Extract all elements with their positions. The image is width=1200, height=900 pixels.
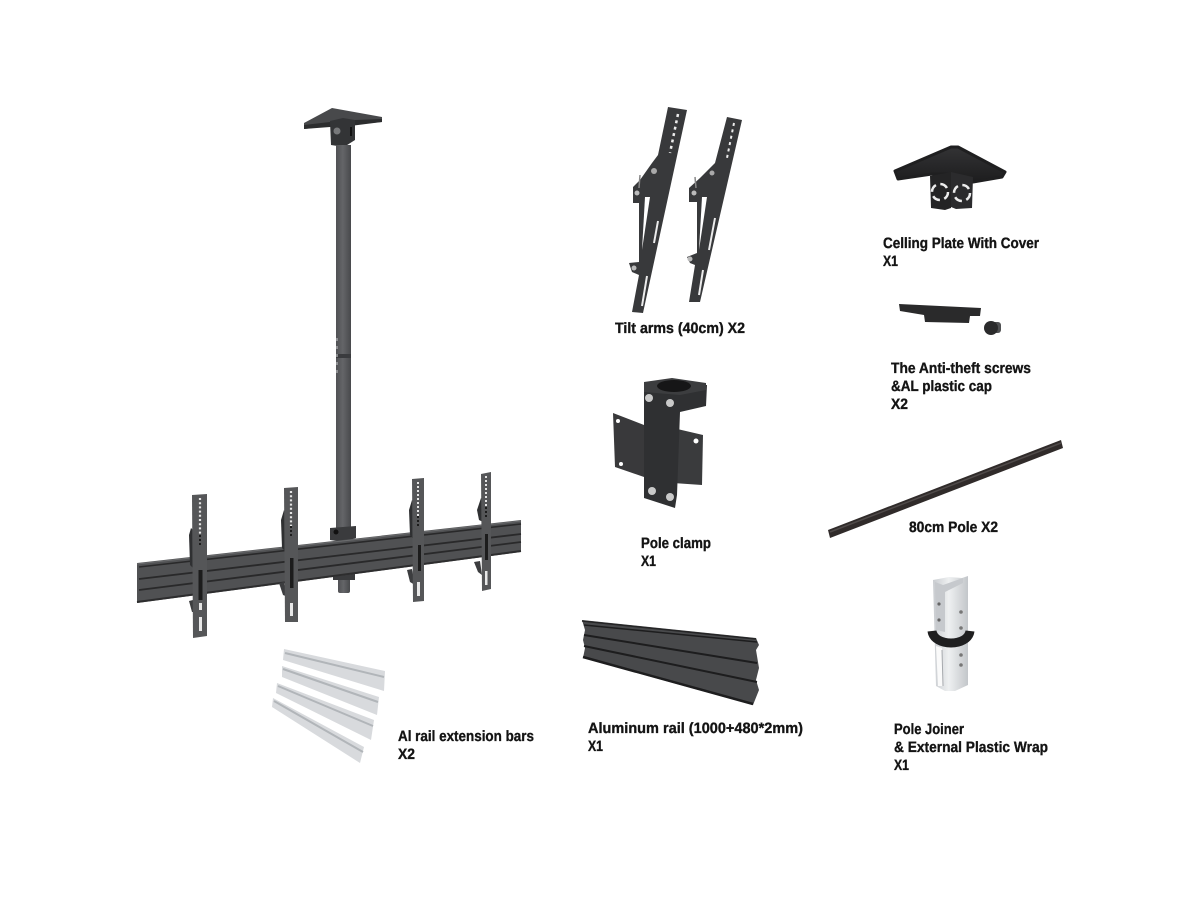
ceiling plate item [883,147,1039,270]
icon: ceiling plate with cover [895,147,1005,210]
icon: 80cm pole [828,440,1063,538]
tilt arms item [615,107,745,337]
label: screws line 2: &AL plastic cap [891,378,992,395]
icon: pole clamp [613,378,707,508]
icon: tilt arm left [629,107,687,313]
label: tilt arms: Tilt arms (40cm) X2 [615,320,745,337]
label: aluminum rail quantity: X1 [588,738,603,755]
icon: tilt arm right [687,117,742,302]
80cm pole item [828,440,1063,538]
label: ceiling plate: Celling Plate With Cover [883,235,1039,252]
icon: vertical pole [333,145,355,593]
label: pole joiner quantity: X1 [894,757,909,774]
icon: plastic cap [899,304,981,323]
label: extension bars: Al rail extension bars [398,728,534,745]
label: pole joiner line 2: & External Plastic Wrap [894,739,1048,756]
label: pole clamp: Pole clamp [641,535,711,552]
label: pole joiner line 1: Pole Joiner [894,721,964,738]
icon: pole clamp on rail [330,526,356,542]
aluminum rail item [582,620,803,755]
label: screws quantity: X2 [891,396,908,413]
label: screws line 1: The Anti-theft screws [891,360,1031,377]
icon: pole joiner with plastic wrap [932,576,970,691]
label: aluminum rail: Aluminum rail (1000+480*2mm) [588,720,803,737]
icon: rail upright 3 [407,478,424,602]
icon: anti-theft screw [984,321,1001,335]
pole clamp item [613,378,711,570]
icon: rail upright 4 [474,472,491,591]
extension bars item [272,649,534,763]
anti-theft screws item [891,304,1031,413]
label: ceiling plate quantity: X1 [883,253,898,270]
label: pole clamp quantity: X1 [641,553,656,570]
icon: aluminum rail [582,620,759,705]
icon: horizontal rail [137,520,521,603]
pole joiner item [894,576,1048,774]
icon: rail upright 1 [189,494,207,638]
icon: extension bars [272,649,385,763]
label: 80cm pole: 80cm Pole X2 [909,519,998,536]
icon: top ceiling plate [304,108,382,147]
icon: rail upright 2 [279,487,298,622]
assembled ceiling mount [137,108,521,638]
label: extension bars quantity: X2 [398,746,415,763]
